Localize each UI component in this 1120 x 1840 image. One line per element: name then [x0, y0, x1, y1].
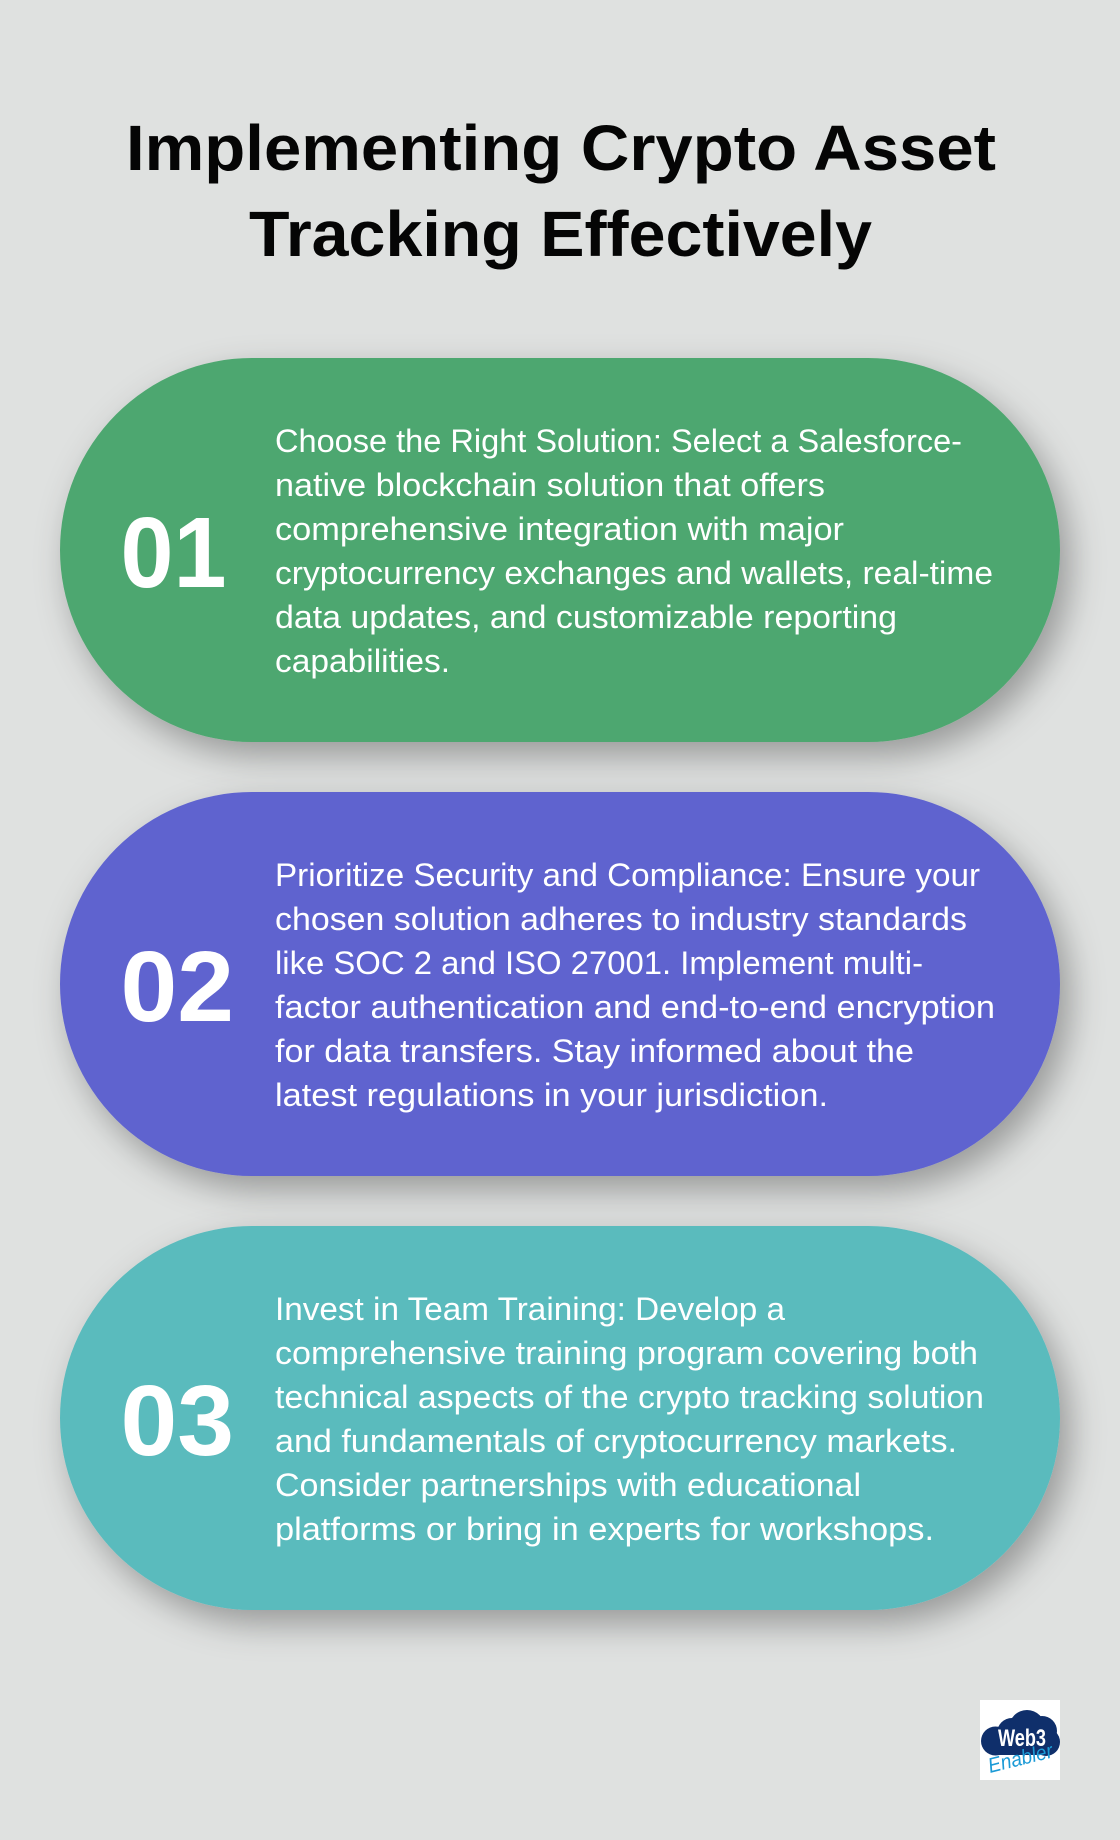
text: invest in team training: technical aspects of the crypto tracking solution: [275, 1379, 984, 1415]
number 02: 02: [120, 931, 234, 1043]
text: choose the right solution: comprehensive integration with major: [275, 511, 844, 547]
text: invest in team training: [275, 1291, 984, 1547]
title: Implementing Crypto Asset: [126, 112, 996, 184]
text: choose the right solution: native blockchain solution that offers: [275, 467, 825, 503]
panel: step 01: [60, 358, 1060, 742]
text: prioritize security and compliance: chosen solution adheres to industry standards: [275, 901, 967, 937]
text: prioritize security and compliance: for data transfers. Stay informed about the: [275, 1033, 914, 1069]
number 01: 01: [120, 497, 226, 609]
text: prioritize security and compliance: like SOC 2 and ISO 27001. Implement multi-: [275, 945, 923, 981]
text: prioritize security and compliance: Prioritize Security and Compliance: Ensure your: [275, 857, 980, 893]
text: choose the right solution: Choose the Right Solution: Select a Salesforce-: [275, 423, 962, 459]
text: invest in team training: and fundamentals of cryptocurrency markets.: [275, 1423, 957, 1459]
title: [126, 112, 996, 270]
pill background: green: [60, 358, 1060, 742]
text: choose the right solution: capabilities.: [275, 643, 450, 679]
text: invest in team training: platforms or bring in experts for workshops.: [275, 1511, 934, 1547]
number 03: 03: [120, 1365, 234, 1477]
text: invest in team training: Invest in Team Training: Develop a: [275, 1291, 785, 1327]
text: choose the right solution: cryptocurrency exchanges and wallets, real-time: [275, 555, 993, 591]
panel: step 02: [60, 792, 1060, 1176]
text: choose the right solution: [275, 423, 993, 679]
text: prioritize security and compliance: factor authentication and end-to-end encryption: [275, 989, 995, 1025]
text: prioritize security and compliance: latest regulations in your jurisdiction.: [275, 1077, 828, 1113]
text: choose the right solution: data updates, and customizable reporting: [275, 599, 897, 635]
text: prioritize security and compliance: [275, 857, 995, 1113]
logo wordmark: Enabler: Enabler: [986, 1739, 1056, 1778]
panel: step 03: [60, 1226, 1060, 1610]
icon: cloud: [981, 1710, 1060, 1756]
text: invest in team training: Consider partnerships with educational: [275, 1467, 861, 1503]
pill background: purple: [60, 792, 1060, 1176]
logo: Web3 Enabler: [980, 1700, 1060, 1780]
title: Tracking Effectively: [249, 198, 872, 270]
logo wordmark: Web3: Web3: [998, 1725, 1046, 1752]
logo background: [980, 1700, 1060, 1780]
text: invest in team training: comprehensive training program covering both: [275, 1335, 978, 1371]
pill background: teal: [60, 1226, 1060, 1610]
